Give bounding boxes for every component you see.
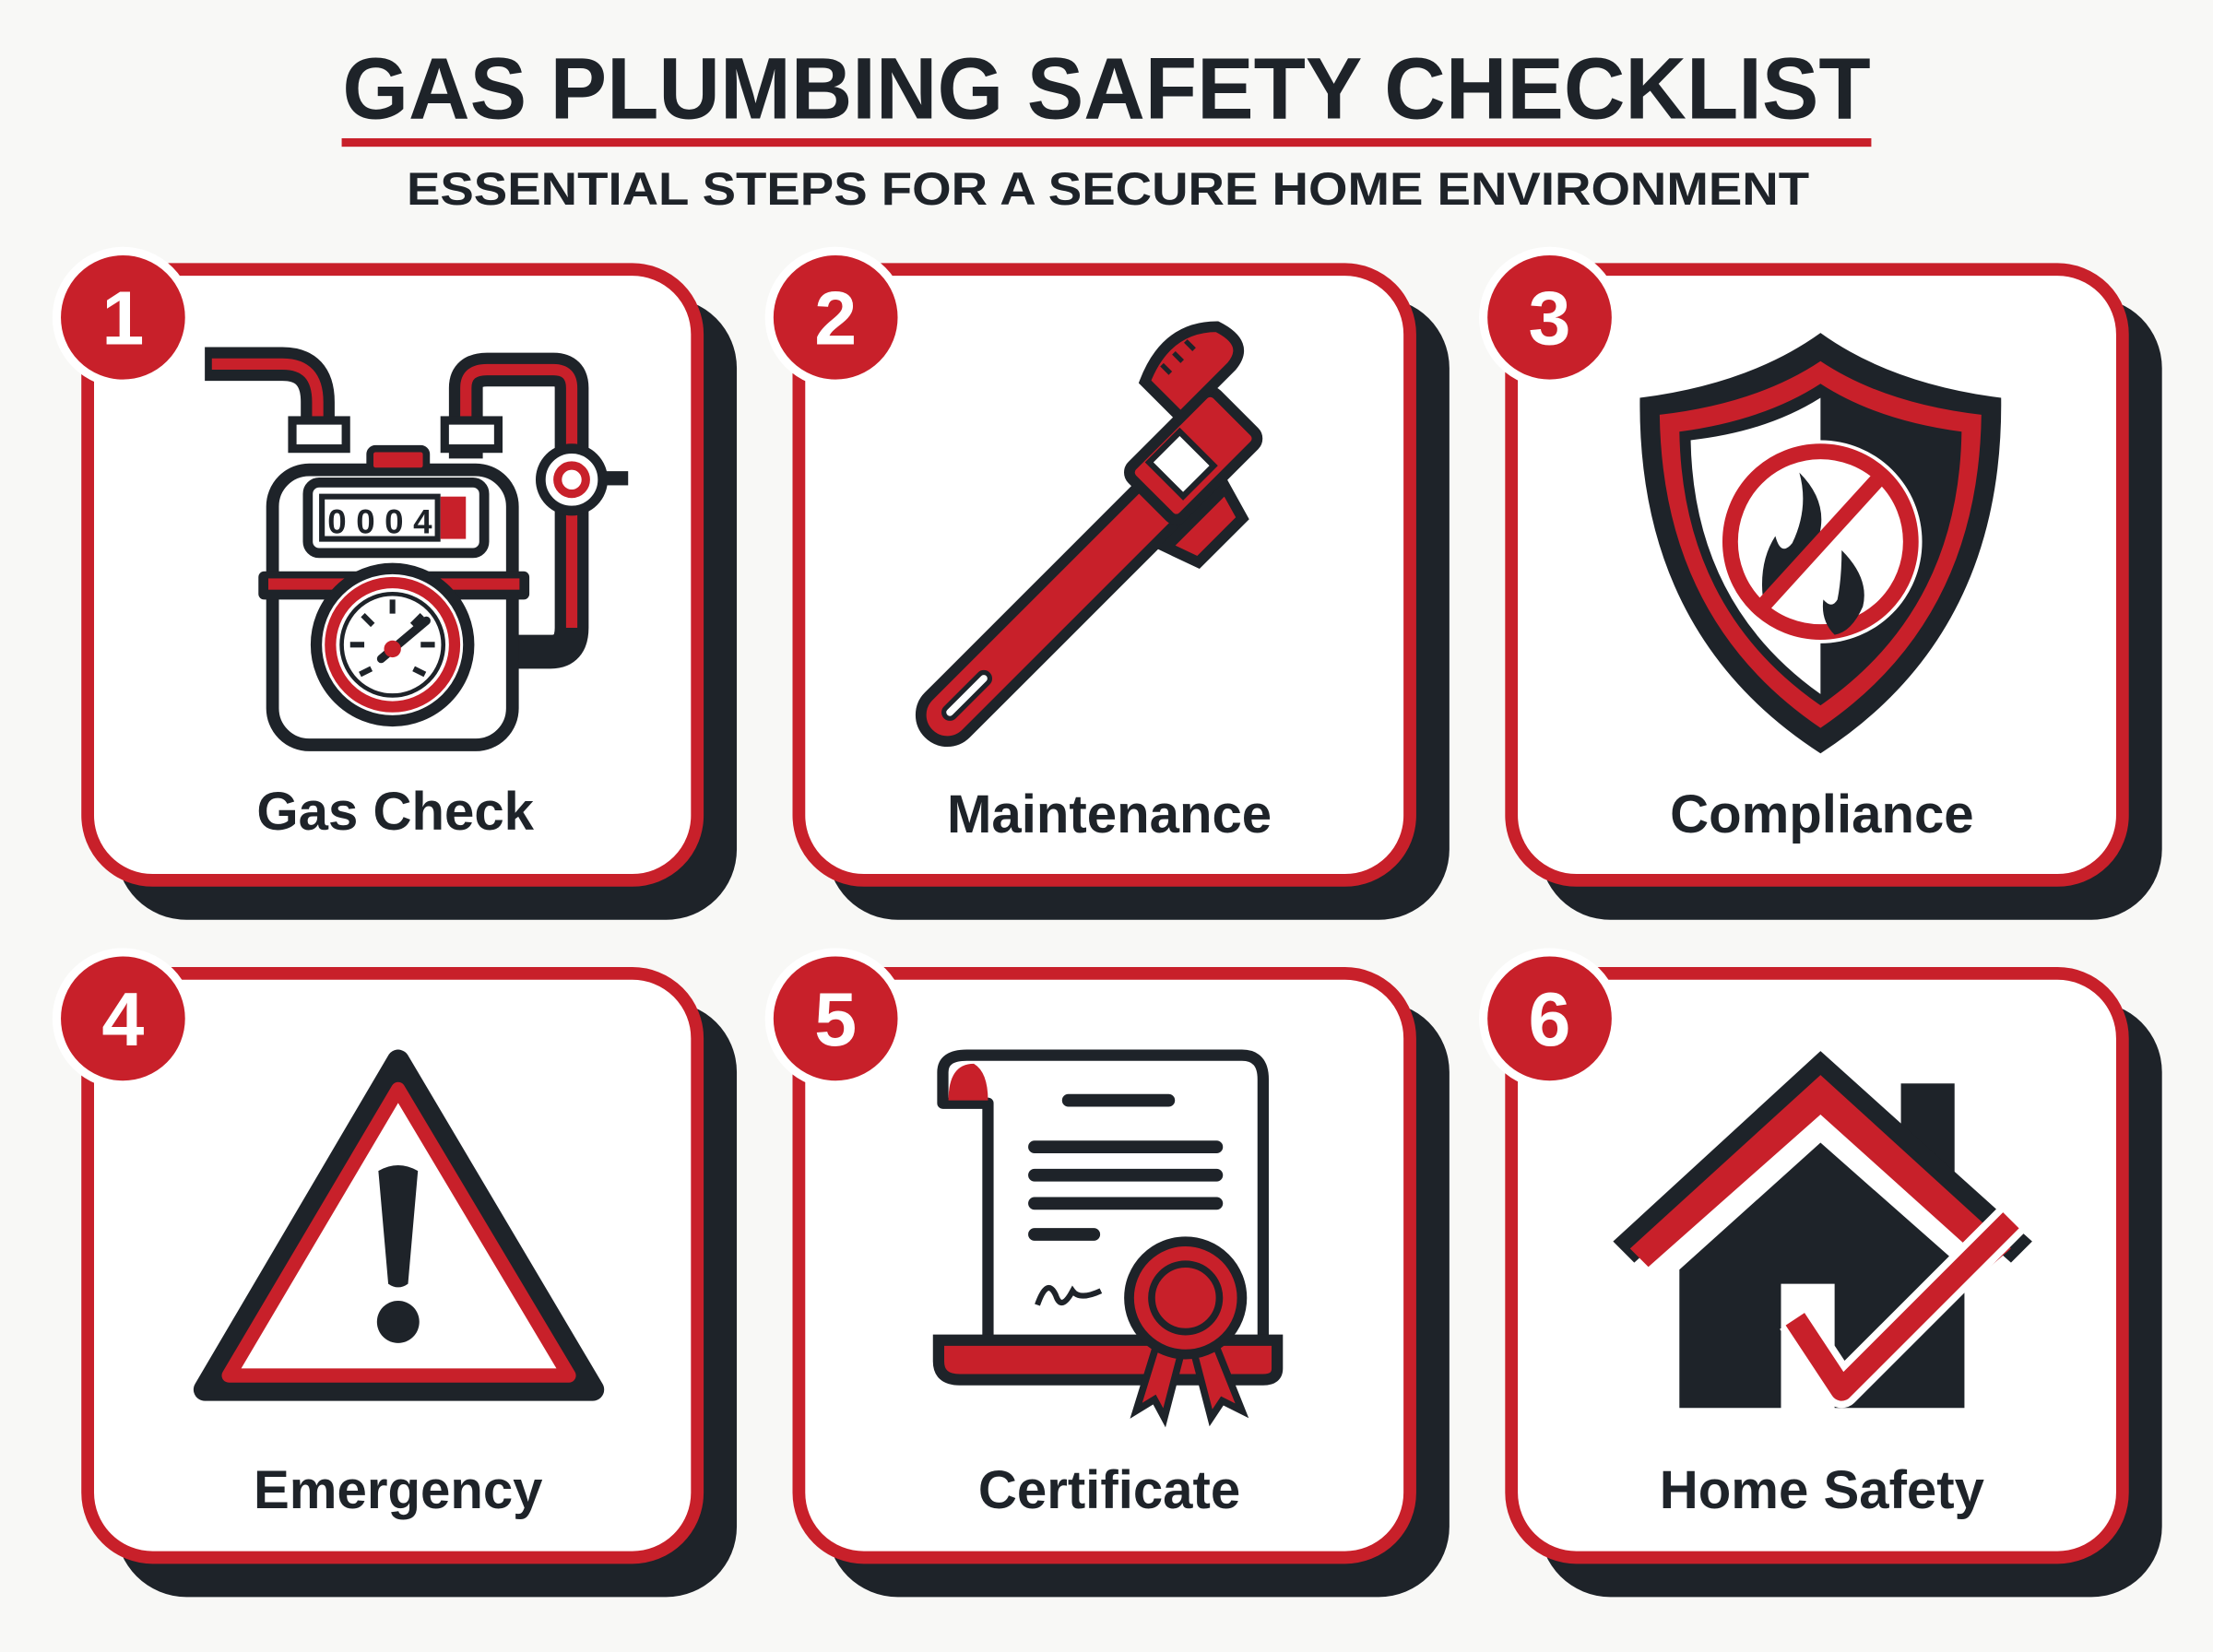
badge 3 xyxy=(1484,251,1615,384)
title: GAS PLUMBING SAFETY CHECKLIST xyxy=(342,41,1871,138)
badge 6: 6 xyxy=(1529,976,1570,1062)
panel: home safety xyxy=(1484,952,2162,1597)
badge 3: 3 xyxy=(1529,275,1570,360)
badge 5: 5 xyxy=(814,976,857,1062)
icon: certificate xyxy=(939,1056,1277,1418)
icon: pipe wrench xyxy=(854,309,1328,783)
badge 4: 4 xyxy=(101,976,144,1062)
badge 2 xyxy=(769,251,902,384)
label: gas check: Gas Check xyxy=(256,782,535,842)
badge 5 xyxy=(769,952,902,1085)
badge 1: 1 xyxy=(101,275,144,360)
subtitle: ESSENTIAL STEPS FOR A SECURE HOME ENVIRONMENT xyxy=(407,162,1809,215)
label: home safety: Home Safety xyxy=(1660,1460,1985,1520)
panel: maintenance xyxy=(769,251,1450,920)
badge 2: 2 xyxy=(814,275,857,360)
badge 4 xyxy=(56,952,189,1085)
badge 1 xyxy=(56,251,189,384)
icon: gas meter: 0004 xyxy=(327,502,432,540)
label: certificate: Certificate xyxy=(978,1460,1240,1520)
panel: certificate xyxy=(769,952,1450,1597)
icon: house check xyxy=(1613,1051,2032,1408)
label: emergency: Emergency xyxy=(254,1460,543,1520)
icon: gas meter xyxy=(205,364,628,745)
panel: gas check xyxy=(56,251,737,920)
badge 6 xyxy=(1484,952,1615,1085)
icon: shield no-fire xyxy=(1639,333,2001,753)
panel: compliance xyxy=(1484,251,2162,920)
label: maintenance: Maintenance xyxy=(947,785,1272,844)
icon: warning triangle xyxy=(205,1061,593,1389)
label: compliance: Compliance xyxy=(1670,785,1974,844)
panel: emergency xyxy=(56,952,737,1597)
